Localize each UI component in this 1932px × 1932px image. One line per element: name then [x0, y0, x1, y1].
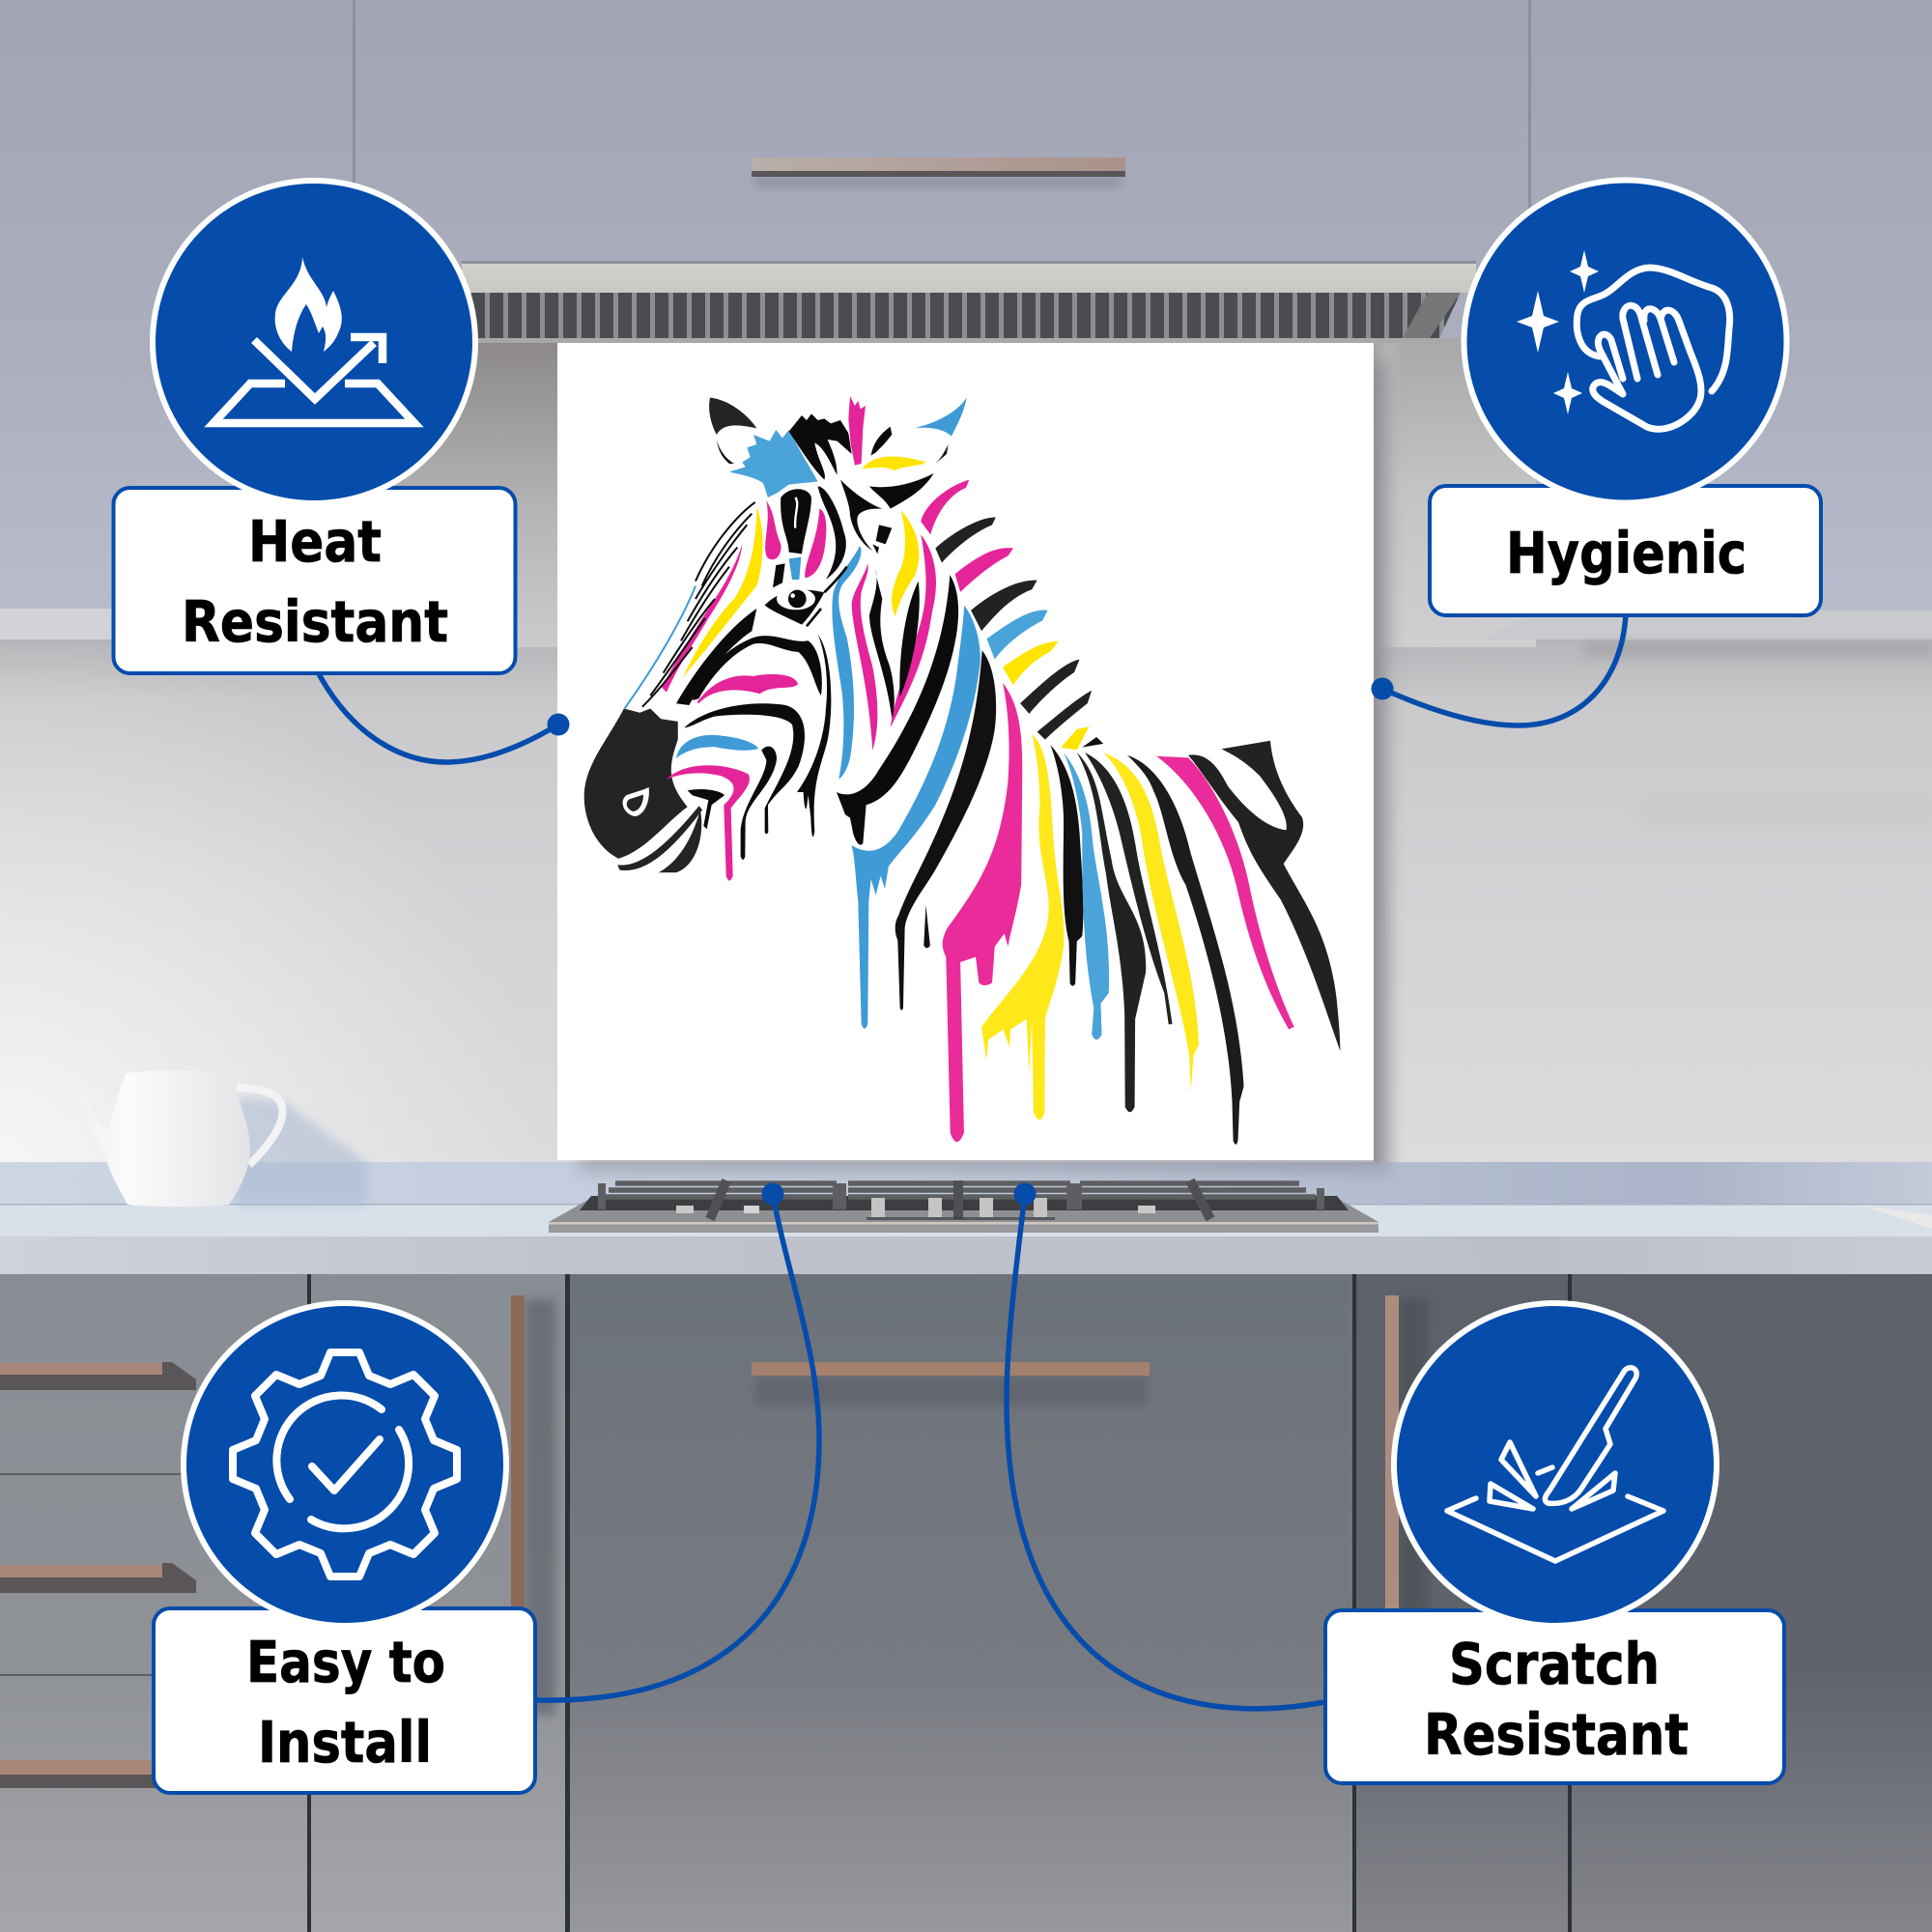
label text: Resistant [182, 588, 448, 655]
label box [114, 488, 516, 673]
cheek stripes [667, 609, 822, 881]
icon: gear with check [233, 1352, 457, 1577]
panel shadow [580, 362, 1389, 1172]
icon badge [153, 181, 475, 503]
cooktop [549, 1180, 1378, 1233]
icon: knife scratching surface [1447, 1368, 1663, 1561]
neck stripes [837, 480, 996, 1029]
forehead stripes [765, 480, 936, 727]
label text [182, 508, 448, 655]
callout: heat resistant [114, 181, 516, 673]
label text: Resistant [1424, 1701, 1689, 1768]
icon badge [184, 1303, 506, 1626]
wall [0, 623, 1932, 1164]
label box [1430, 486, 1821, 615]
icon badge [1394, 1303, 1717, 1626]
zebra mane stripes [935, 517, 1103, 750]
label box [1325, 1610, 1784, 1783]
connector: hygienic [1372, 613, 1626, 725]
icon: flame over deflecting arrow [213, 257, 414, 423]
label text: Easy to [246, 1629, 445, 1695]
countertop [0, 1162, 1932, 1274]
nose-bridge stripes [625, 502, 763, 708]
upper cabinet handle [752, 157, 1125, 187]
callout: scratch resistant [1325, 1303, 1784, 1783]
cabinet underside strip [0, 609, 1932, 657]
wall recess shadow around hood [386, 338, 1536, 1164]
teapot [65, 1070, 367, 1207]
zebra head and neck [623, 396, 996, 1029]
connector: heat resistant [316, 668, 570, 762]
upper cabinets [0, 0, 1932, 611]
long face stripes [797, 546, 920, 837]
panel surface [557, 343, 1374, 1160]
zebra artwork [584, 396, 1340, 1145]
extractor hood [454, 261, 1476, 343]
connector: scratch resistant [1007, 1182, 1324, 1709]
lip and nostril [623, 787, 701, 872]
callout: hygienic [1430, 180, 1821, 615]
zebra body and mane [584, 517, 1340, 1145]
cabinet handles [0, 1295, 1428, 1788]
ears and forelock [709, 396, 967, 509]
base cabinets [0, 1274, 1932, 1932]
zebra muzzle [584, 708, 702, 870]
icon: hand wiping with sparkles [1517, 250, 1730, 429]
connector: easy to install [537, 1182, 819, 1700]
callout: easy to install [154, 1303, 535, 1793]
label text [1424, 1631, 1689, 1768]
zebra body stripes [923, 683, 1340, 1145]
label text: Heat [248, 508, 382, 575]
label text: Scratch [1449, 1631, 1660, 1697]
icon badge [1464, 180, 1787, 502]
label text [246, 1629, 445, 1776]
eye [765, 567, 847, 626]
label text: Hygienic [1506, 520, 1747, 586]
label text: Install [258, 1709, 432, 1776]
product panel [557, 343, 1389, 1172]
label box [154, 1608, 535, 1793]
